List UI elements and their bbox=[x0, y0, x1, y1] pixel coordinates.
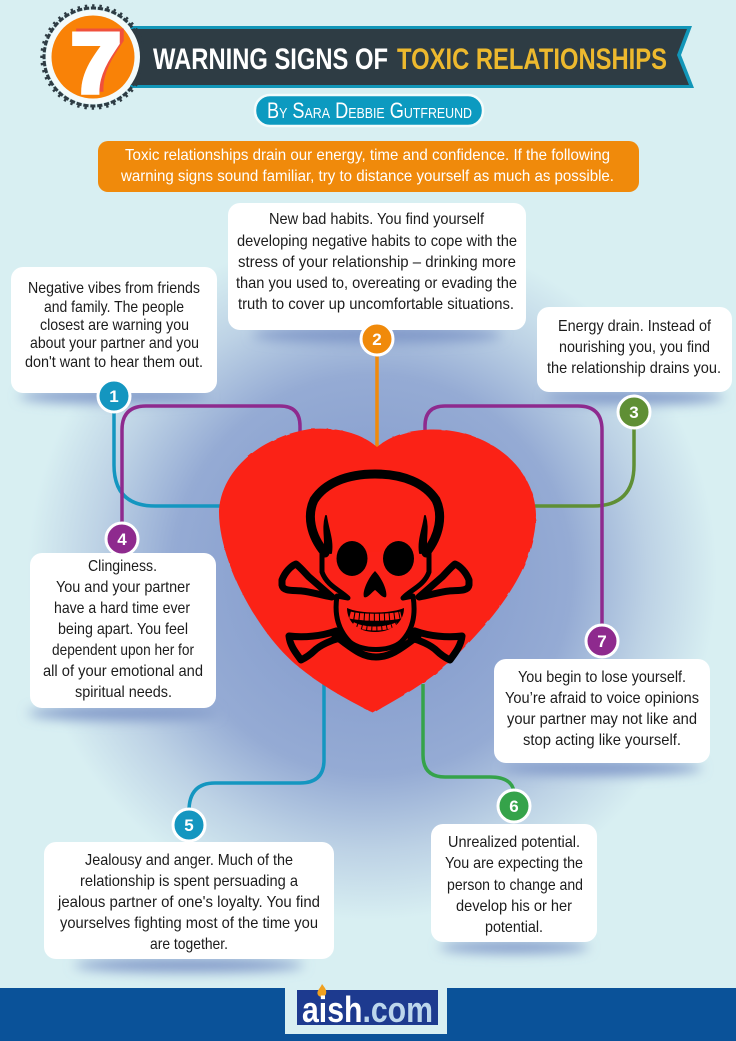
teeth bbox=[350, 615, 401, 617]
heart bbox=[219, 429, 536, 713]
mouth bbox=[347, 608, 404, 632]
marker 3 bbox=[618, 396, 650, 428]
panel: sign 2 bbox=[228, 203, 526, 330]
badge orange disc bbox=[52, 16, 134, 98]
connector 4 bbox=[122, 406, 300, 525]
badge white ring bbox=[46, 10, 140, 104]
marker 7 bbox=[586, 625, 618, 657]
background glow bbox=[0, 220, 736, 988]
box 6 bbox=[431, 824, 597, 942]
intro background bbox=[98, 141, 639, 192]
box shadows bbox=[19, 327, 724, 972]
nose bbox=[364, 571, 386, 597]
text 1: about your partner and you bbox=[30, 335, 199, 352]
box 3 bbox=[537, 307, 732, 392]
marker 6 bbox=[498, 790, 530, 822]
skull outline bbox=[322, 552, 429, 650]
banner ribbon bbox=[130, 29, 689, 85]
intro text: Toxic relationships drain our energy, time and confidence. If the following bbox=[125, 147, 610, 164]
cranium band bbox=[310, 474, 440, 553]
text 3: Energy drain. Instead of bbox=[558, 318, 711, 335]
text 6 bbox=[445, 834, 583, 936]
logo panel bbox=[297, 990, 438, 1025]
text 6: You are expecting the bbox=[445, 855, 583, 872]
text 4: have a hard time ever bbox=[54, 600, 191, 617]
marker 7: 7 bbox=[597, 632, 607, 651]
intro box bbox=[98, 141, 639, 192]
banner ribbon accent bbox=[130, 26, 694, 88]
box 7 bbox=[494, 659, 710, 763]
text 2: truth to cover up uncomfortable situations. bbox=[238, 296, 514, 313]
marker 5: 5 bbox=[184, 816, 194, 835]
text 6: potential. bbox=[485, 919, 543, 936]
text 1: don't want to hear them out. bbox=[25, 354, 203, 371]
upper left bone bbox=[282, 564, 332, 597]
marker 2: 2 bbox=[372, 330, 382, 349]
text 1: and family. The people bbox=[44, 299, 184, 316]
right temple bbox=[420, 516, 427, 553]
box 5 bbox=[44, 842, 334, 959]
intro text: warning signs sound familiar, try to distance yourself as much as possible. bbox=[120, 168, 614, 185]
text 7: your partner may not like and bbox=[507, 711, 697, 728]
connector lines bbox=[114, 353, 634, 811]
text 2: than you used to, overeating or evading the bbox=[236, 275, 517, 292]
title highlight: TOXIC RELATIONSHIPS bbox=[397, 43, 667, 76]
heart with skull bbox=[219, 429, 536, 713]
marker 6: 6 bbox=[509, 797, 519, 816]
panel: sign 3 bbox=[537, 307, 732, 392]
number badge bbox=[42, 6, 144, 110]
text 4: dependent upon her for bbox=[52, 642, 195, 659]
logo text: aish.com bbox=[302, 989, 433, 1030]
logo flame bbox=[317, 984, 326, 997]
text 5: yourselves fighting most of the time you bbox=[60, 915, 318, 932]
text 2: stress of your relationship – drinking more bbox=[238, 254, 516, 271]
text 5 bbox=[57, 852, 320, 953]
text 5: are together. bbox=[150, 936, 228, 953]
text 7: stop acting like yourself. bbox=[523, 732, 681, 749]
lower left bone bbox=[289, 631, 340, 660]
lower teeth bbox=[353, 624, 397, 628]
badge teeth outer bbox=[42, 6, 144, 108]
badge teeth inner bbox=[44, 8, 142, 106]
text 1: closest are warning you bbox=[40, 317, 189, 334]
text 4: being apart. You feel bbox=[58, 621, 188, 638]
lower right bone bbox=[411, 631, 462, 660]
badge number shadow: 7 bbox=[75, 13, 125, 107]
text 5: relationship is spent persuading a bbox=[80, 873, 298, 890]
title text: WARNING SIGNS OF bbox=[153, 43, 388, 76]
text 2: New bad habits. You find yourself bbox=[269, 211, 484, 228]
marker 4 bbox=[106, 523, 138, 555]
box 2 bbox=[228, 203, 526, 330]
chin band bbox=[335, 636, 418, 657]
logo backing bbox=[285, 985, 447, 1034]
connector 5 bbox=[189, 684, 324, 811]
connector 1 bbox=[114, 410, 222, 506]
connector 6 bbox=[423, 684, 514, 792]
connector 3 bbox=[535, 426, 634, 506]
connector 7 bbox=[425, 406, 602, 627]
marker 4: 4 bbox=[117, 530, 127, 549]
panel: sign 4 bbox=[30, 553, 216, 708]
text 1 bbox=[25, 280, 203, 371]
intro text bbox=[120, 147, 614, 185]
pill shape bbox=[255, 95, 483, 126]
text 4: spiritual needs. bbox=[75, 684, 172, 701]
text 3: nourishing you, you find bbox=[559, 339, 710, 356]
footer bar bbox=[0, 988, 736, 1041]
text 5: Jealousy and anger. Much of the bbox=[85, 852, 293, 869]
text 3: the relationship drains you. bbox=[547, 360, 721, 377]
text 6: Unrealized potential. bbox=[448, 834, 580, 851]
text 6: develop his or her bbox=[456, 898, 573, 915]
text 4: You and your partner bbox=[56, 579, 191, 596]
text 4: Clinginess. bbox=[88, 558, 157, 575]
left temple bbox=[324, 516, 331, 553]
upper right bone bbox=[419, 564, 469, 597]
left eye bbox=[336, 541, 368, 576]
text 7: You begin to lose yourself. bbox=[518, 669, 686, 686]
text 2 bbox=[236, 211, 517, 313]
box 4 bbox=[30, 553, 216, 708]
connector 2 bbox=[375, 353, 379, 448]
text 4: all of your emotional and bbox=[43, 663, 203, 680]
text 4 bbox=[43, 558, 203, 701]
marker 1 bbox=[98, 380, 130, 412]
panel: sign 7 bbox=[494, 659, 710, 763]
marker 2 bbox=[361, 323, 393, 355]
marker 3: 3 bbox=[629, 403, 639, 422]
marker 1: 1 bbox=[109, 387, 119, 406]
byline pill bbox=[255, 95, 483, 126]
text 1: Negative vibes from friends bbox=[28, 280, 200, 297]
badge number: 7 bbox=[71, 16, 121, 110]
text 7 bbox=[505, 669, 699, 749]
text 6: person to change and bbox=[447, 877, 583, 894]
text 7: You’re afraid to voice opinions bbox=[505, 690, 699, 707]
panel: sign 1 bbox=[11, 267, 217, 393]
text 2: developing negative habits to cope with the bbox=[237, 233, 517, 250]
number markers bbox=[98, 323, 650, 841]
skull and crossbones bbox=[282, 474, 469, 660]
byline text: By Sara Debbie Gutfreund bbox=[267, 98, 472, 123]
text 5: jealous partner of one's loyalty. You find bbox=[57, 894, 320, 911]
panel: sign 5 bbox=[44, 842, 334, 959]
right eye bbox=[383, 541, 414, 576]
aish.com logo bbox=[285, 984, 447, 1034]
text 3 bbox=[547, 318, 721, 377]
title banner bbox=[130, 26, 694, 88]
marker 5 bbox=[173, 809, 205, 841]
box 1 bbox=[11, 267, 217, 393]
panel: sign 6 bbox=[431, 824, 597, 942]
